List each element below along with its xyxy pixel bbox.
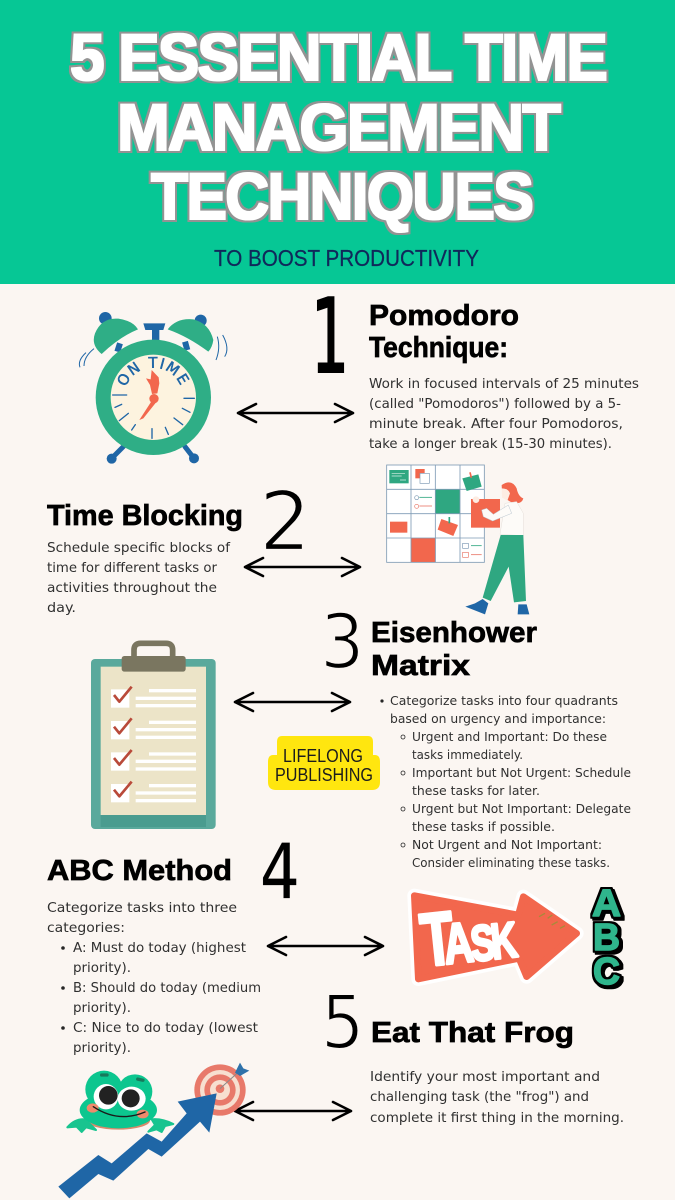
heading: Eisenhower Matrix xyxy=(371,617,537,682)
text: ABC Method bullet list: priority). xyxy=(73,1041,131,1056)
panel: Eisenhower Matrix xyxy=(91,598,631,870)
icon: alarm clock xyxy=(78,312,228,464)
icon: task arrow: K xyxy=(488,913,520,970)
text: Time Blocking description: Schedule specific blocks of xyxy=(47,541,230,556)
text: Eat That Frog description: challenging task (the "frog") and xyxy=(370,1090,589,1105)
panel: ABC Method xyxy=(47,828,621,1056)
heading: Eat That Frog: Eat That Frog xyxy=(371,1017,574,1049)
heading: ABC Method: ABC Method xyxy=(47,855,232,887)
number 5: 5 xyxy=(321,979,364,1066)
icon: ABC letters: B xyxy=(593,917,620,959)
heading: Eisenhower Matrix: Matrix xyxy=(371,650,470,682)
text: Eisenhower bullet list: Important but Not Urgent: Schedule xyxy=(412,766,631,780)
header banner xyxy=(0,0,675,284)
icon: task arrow xyxy=(414,889,577,982)
number 4: 4 xyxy=(260,828,300,917)
number 3: 3 xyxy=(320,598,364,687)
title: TECHNIQUES xyxy=(151,159,532,233)
text: Eisenhower bullet list: Urgent but Not Important: Delegate xyxy=(412,802,631,816)
title: MANAGEMENT xyxy=(117,90,561,164)
text: Time Blocking description: time for different tasks or xyxy=(47,561,217,576)
text: Pomodoro description: minute break. After four Pomodoros, xyxy=(369,417,623,432)
text: Eisenhower bullet list: these tasks for later. xyxy=(412,784,540,798)
illustration: woman with schedule grid xyxy=(387,465,529,614)
icon: task arrow: S xyxy=(468,915,498,973)
heading: Pomodoro Technique xyxy=(369,300,519,364)
heading: Pomodoro Technique: Technique: xyxy=(369,332,508,364)
text: ABC Method bullet list xyxy=(47,901,261,1056)
text: Eisenhower bullet list: based on urgency and importance: xyxy=(390,712,606,726)
title: 5 ESSENTIAL TIME xyxy=(70,20,606,94)
text: ABC Method bullet list: priority). xyxy=(73,961,131,976)
text: Eat That Frog description: Identify your most important and xyxy=(370,1070,600,1085)
text: ABC Method bullet list: C: Nice to do today (lowest xyxy=(73,1021,258,1036)
number 1: 1 xyxy=(311,277,349,396)
arrow: double headed xyxy=(245,558,360,576)
text: Time Blocking description: activities throughout the xyxy=(47,581,217,596)
arrow: double headed xyxy=(235,1102,351,1120)
icon: alarm clock: ON TIME xyxy=(118,356,190,386)
arrow: double headed xyxy=(235,693,350,711)
text: Pomodoro description xyxy=(369,377,639,452)
text: Pomodoro description: take a longer break (15-30 minutes). xyxy=(369,437,612,452)
number 2: 2 xyxy=(259,475,311,570)
text: ABC Method bullet list: B: Should do today (medium xyxy=(73,981,261,996)
text: ABC Method bullet list: Categorize tasks into three xyxy=(47,901,237,916)
icon: ABC letters: A xyxy=(592,883,621,925)
icon: task arrow: A xyxy=(440,911,476,977)
text: Pomodoro description: (called "Pomodoros") followed by a 5- xyxy=(369,397,621,412)
text: Eisenhower bullet list: Consider eliminating these tasks. xyxy=(412,856,610,870)
text: Eisenhower bullet list xyxy=(380,694,631,870)
icon: target with dart xyxy=(194,1063,249,1116)
panel: Eat That Frog xyxy=(58,979,624,1198)
icon: rising blue arrow xyxy=(58,1093,217,1198)
panel: Time Blocking xyxy=(47,465,529,616)
heading: Pomodoro Technique: Pomodoro xyxy=(369,300,519,332)
icon: task arrow: T xyxy=(417,896,458,982)
text: Eat That Frog description xyxy=(370,1070,624,1126)
heading: Time Blocking: Time Blocking xyxy=(47,500,243,532)
icon: ABC letters xyxy=(592,883,621,993)
text: Eisenhower bullet list: Not Urgent and Not Important: xyxy=(412,838,602,852)
icon: clipboard checklist xyxy=(91,643,216,829)
badge: Lifelong Publishing xyxy=(268,736,380,790)
title xyxy=(70,20,606,233)
panel: Pomodoro Technique xyxy=(78,277,639,464)
icon: ABC letters: C xyxy=(593,951,620,993)
icon: frog xyxy=(67,1071,173,1132)
badge: Lifelong Publishing: PUBLISHING xyxy=(275,765,373,785)
text: ABC Method bullet list: priority). xyxy=(73,1001,131,1016)
text: Eisenhower bullet list: Urgent and Important: Do these xyxy=(412,730,607,744)
subtitle: TO BOOST PRODUCTIVITY xyxy=(214,245,479,271)
arrow: double headed xyxy=(268,937,383,955)
text: Time Blocking description xyxy=(47,541,230,616)
text: Eisenhower bullet list: Categorize tasks into four quadrants xyxy=(390,694,618,708)
badge: Lifelong Publishing: LIFELONG xyxy=(283,746,363,766)
text: Pomodoro description: Work in focused intervals of 25 minutes xyxy=(369,377,639,392)
text: ABC Method bullet list: A: Must do today (highest xyxy=(73,941,246,956)
text: Eat That Frog description: complete it first thing in the morning. xyxy=(370,1111,624,1126)
heading: Eisenhower Matrix: Eisenhower xyxy=(371,617,537,649)
arrow: double headed xyxy=(238,404,353,422)
text: Eisenhower bullet list: tasks immediately. xyxy=(412,748,523,762)
text: ABC Method bullet list: categories: xyxy=(47,921,125,936)
text: Time Blocking description: day. xyxy=(47,601,76,616)
text: Eisenhower bullet list: these tasks if possible. xyxy=(412,820,555,834)
